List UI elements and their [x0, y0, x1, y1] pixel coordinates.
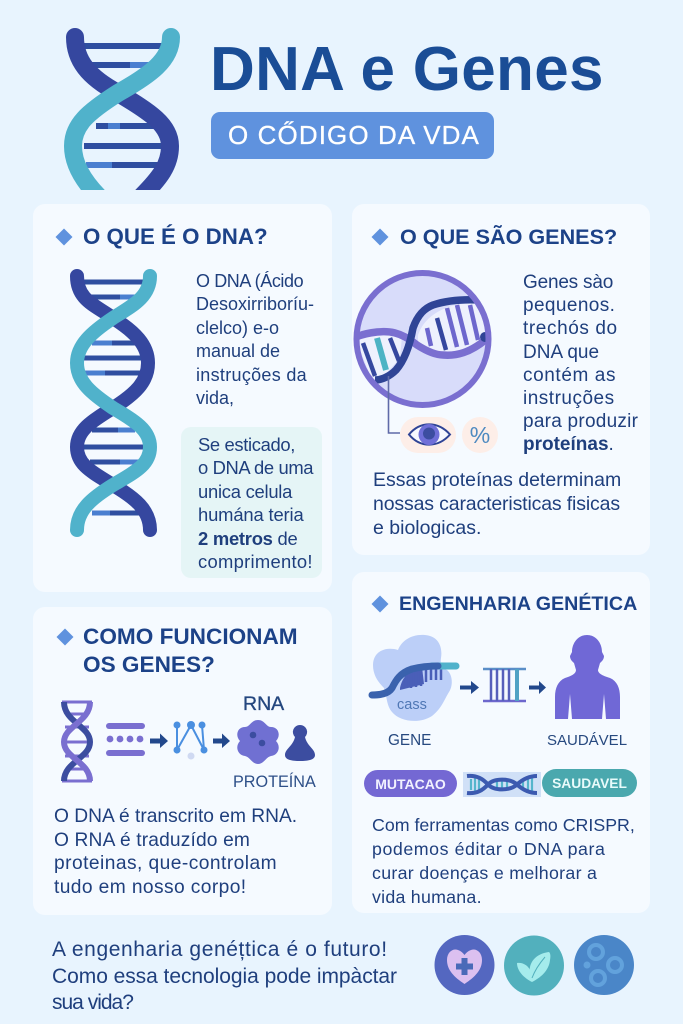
arrow: [150, 734, 168, 748]
callout: [181, 427, 322, 578]
heading: O QUE É O DNA?: [83, 224, 268, 249]
text block: proteinas, que-controlam: [54, 853, 277, 874]
pill: saudavel: [542, 769, 637, 797]
text block: curar doenças e melhorar a: [372, 863, 597, 883]
pill: saudavel: SAUDAVEL: [552, 776, 627, 791]
heading: ENGENHARIA GENÉTICA: [399, 593, 637, 615]
label: proteína: PROTEÍNA: [233, 772, 316, 791]
text block: proteins: [373, 469, 621, 539]
text block: instruções: [523, 388, 615, 409]
panel: o que são genes: [352, 204, 650, 555]
text block: proteins: nossas caracteristicas fisicas: [373, 493, 620, 515]
text block: DNA que: [523, 342, 599, 363]
arrow: [213, 734, 230, 748]
text block: Desoxirriboríu-: [196, 294, 314, 314]
callout text: humána teria: [198, 504, 304, 525]
text block: vida humana.: [372, 887, 482, 907]
icon: diamond bullet: [56, 228, 72, 246]
subtitle pill: O CŐDIGO DA VDA: [228, 120, 480, 150]
icon: cells: [574, 935, 634, 995]
callout text: o DNA de uma: [198, 457, 313, 478]
icon: cas enzyme with DNA: cass: [397, 697, 427, 713]
heading: OS GENES?: [83, 652, 215, 677]
icon: diamond bullet: [372, 596, 388, 612]
text block: [54, 806, 297, 898]
panel: como funcionam os genes: [33, 607, 332, 915]
footer text: sua vida?: [52, 991, 133, 1014]
text block: [372, 815, 635, 907]
label: gene: GENE: [388, 732, 431, 749]
gene magnifier illustration: [354, 270, 498, 453]
text block: [523, 272, 638, 455]
callout text: comprimento!: [198, 551, 313, 572]
heading: O QUE SÃO GENES?: [400, 224, 617, 249]
text block: O DNA (Ácido: [196, 271, 303, 291]
process diagram: DNA to RNA to protein: [61, 693, 316, 791]
icon: health heart: [434, 935, 494, 995]
text block: pequenos.: [523, 295, 615, 316]
text block: vida,: [196, 388, 234, 408]
footer text: A engenharia genéțtica é o futuro!: [52, 938, 388, 961]
callout text: [198, 434, 314, 572]
label: RNA: RNA: [243, 693, 284, 715]
panel: engenharia genética: [352, 572, 650, 913]
gene magnifier illustration: %: [470, 422, 490, 448]
arrow: [460, 681, 479, 694]
heading: [83, 624, 298, 677]
text block: contém as: [523, 365, 616, 386]
text block: trechós do: [523, 318, 618, 339]
text block: para produzir: [523, 411, 638, 432]
icon: mini DNA: [62, 702, 92, 781]
icon: healthy person: [555, 635, 620, 719]
icon: transcript bars: [106, 723, 145, 756]
text block: instruções da: [196, 365, 307, 385]
CRISPR diagram: [368, 634, 627, 749]
text block: proteins: Essas proteínas determinam: [373, 469, 621, 491]
text block: clelco) e-o: [196, 318, 279, 338]
footer text: Como essa tecnologia pode impàctar: [52, 964, 397, 988]
pill: mutacao: [364, 770, 457, 797]
footer text: [52, 938, 397, 1014]
title: DNA e Genes: [210, 35, 604, 104]
text block: O RNA é traduzído em: [54, 830, 250, 851]
text block: podemos éditar o DNA para: [372, 839, 605, 859]
pill: mutacao: MUTACAO: [375, 776, 446, 792]
icon: cas enzyme with DNA: [372, 635, 456, 721]
text block: [196, 271, 314, 408]
callout text: 2 metros de: [198, 528, 298, 549]
icon: person: [285, 725, 315, 761]
text block: Com ferramentas como CRISPR,: [372, 815, 635, 835]
text block: proteínas.: [523, 434, 614, 455]
icon: DNA ladder: [483, 669, 526, 701]
panel: o que é o DNA: [33, 204, 332, 592]
icon: protein blob: [237, 720, 279, 764]
icon: horizontal DNA strip: [463, 772, 541, 797]
text block: proteins: e biologicas.: [373, 517, 481, 539]
callout text: unica celula: [198, 481, 292, 502]
icon: diamond bullet: [372, 228, 388, 246]
icon: leaf: [504, 936, 564, 996]
arrow: [529, 681, 546, 694]
text block: tudo em nosso corpo!: [54, 877, 247, 898]
text block: manual de: [196, 341, 280, 361]
text block: O DNA é transcrito em RNA.: [54, 806, 297, 827]
text block: Genes sào: [523, 272, 613, 293]
DNA helix illustration: [70, 269, 157, 537]
header: DNA helix icon: [64, 28, 180, 190]
heading: COMO FUNCIONAM: [83, 624, 298, 649]
icon: diamond bullet: [56, 628, 74, 646]
icon: RNA network: [174, 721, 208, 760]
callout text: Se esticado,: [198, 434, 295, 455]
label: saudável: SAUDÁVEL: [547, 732, 627, 749]
subtitle pill: [211, 112, 494, 159]
